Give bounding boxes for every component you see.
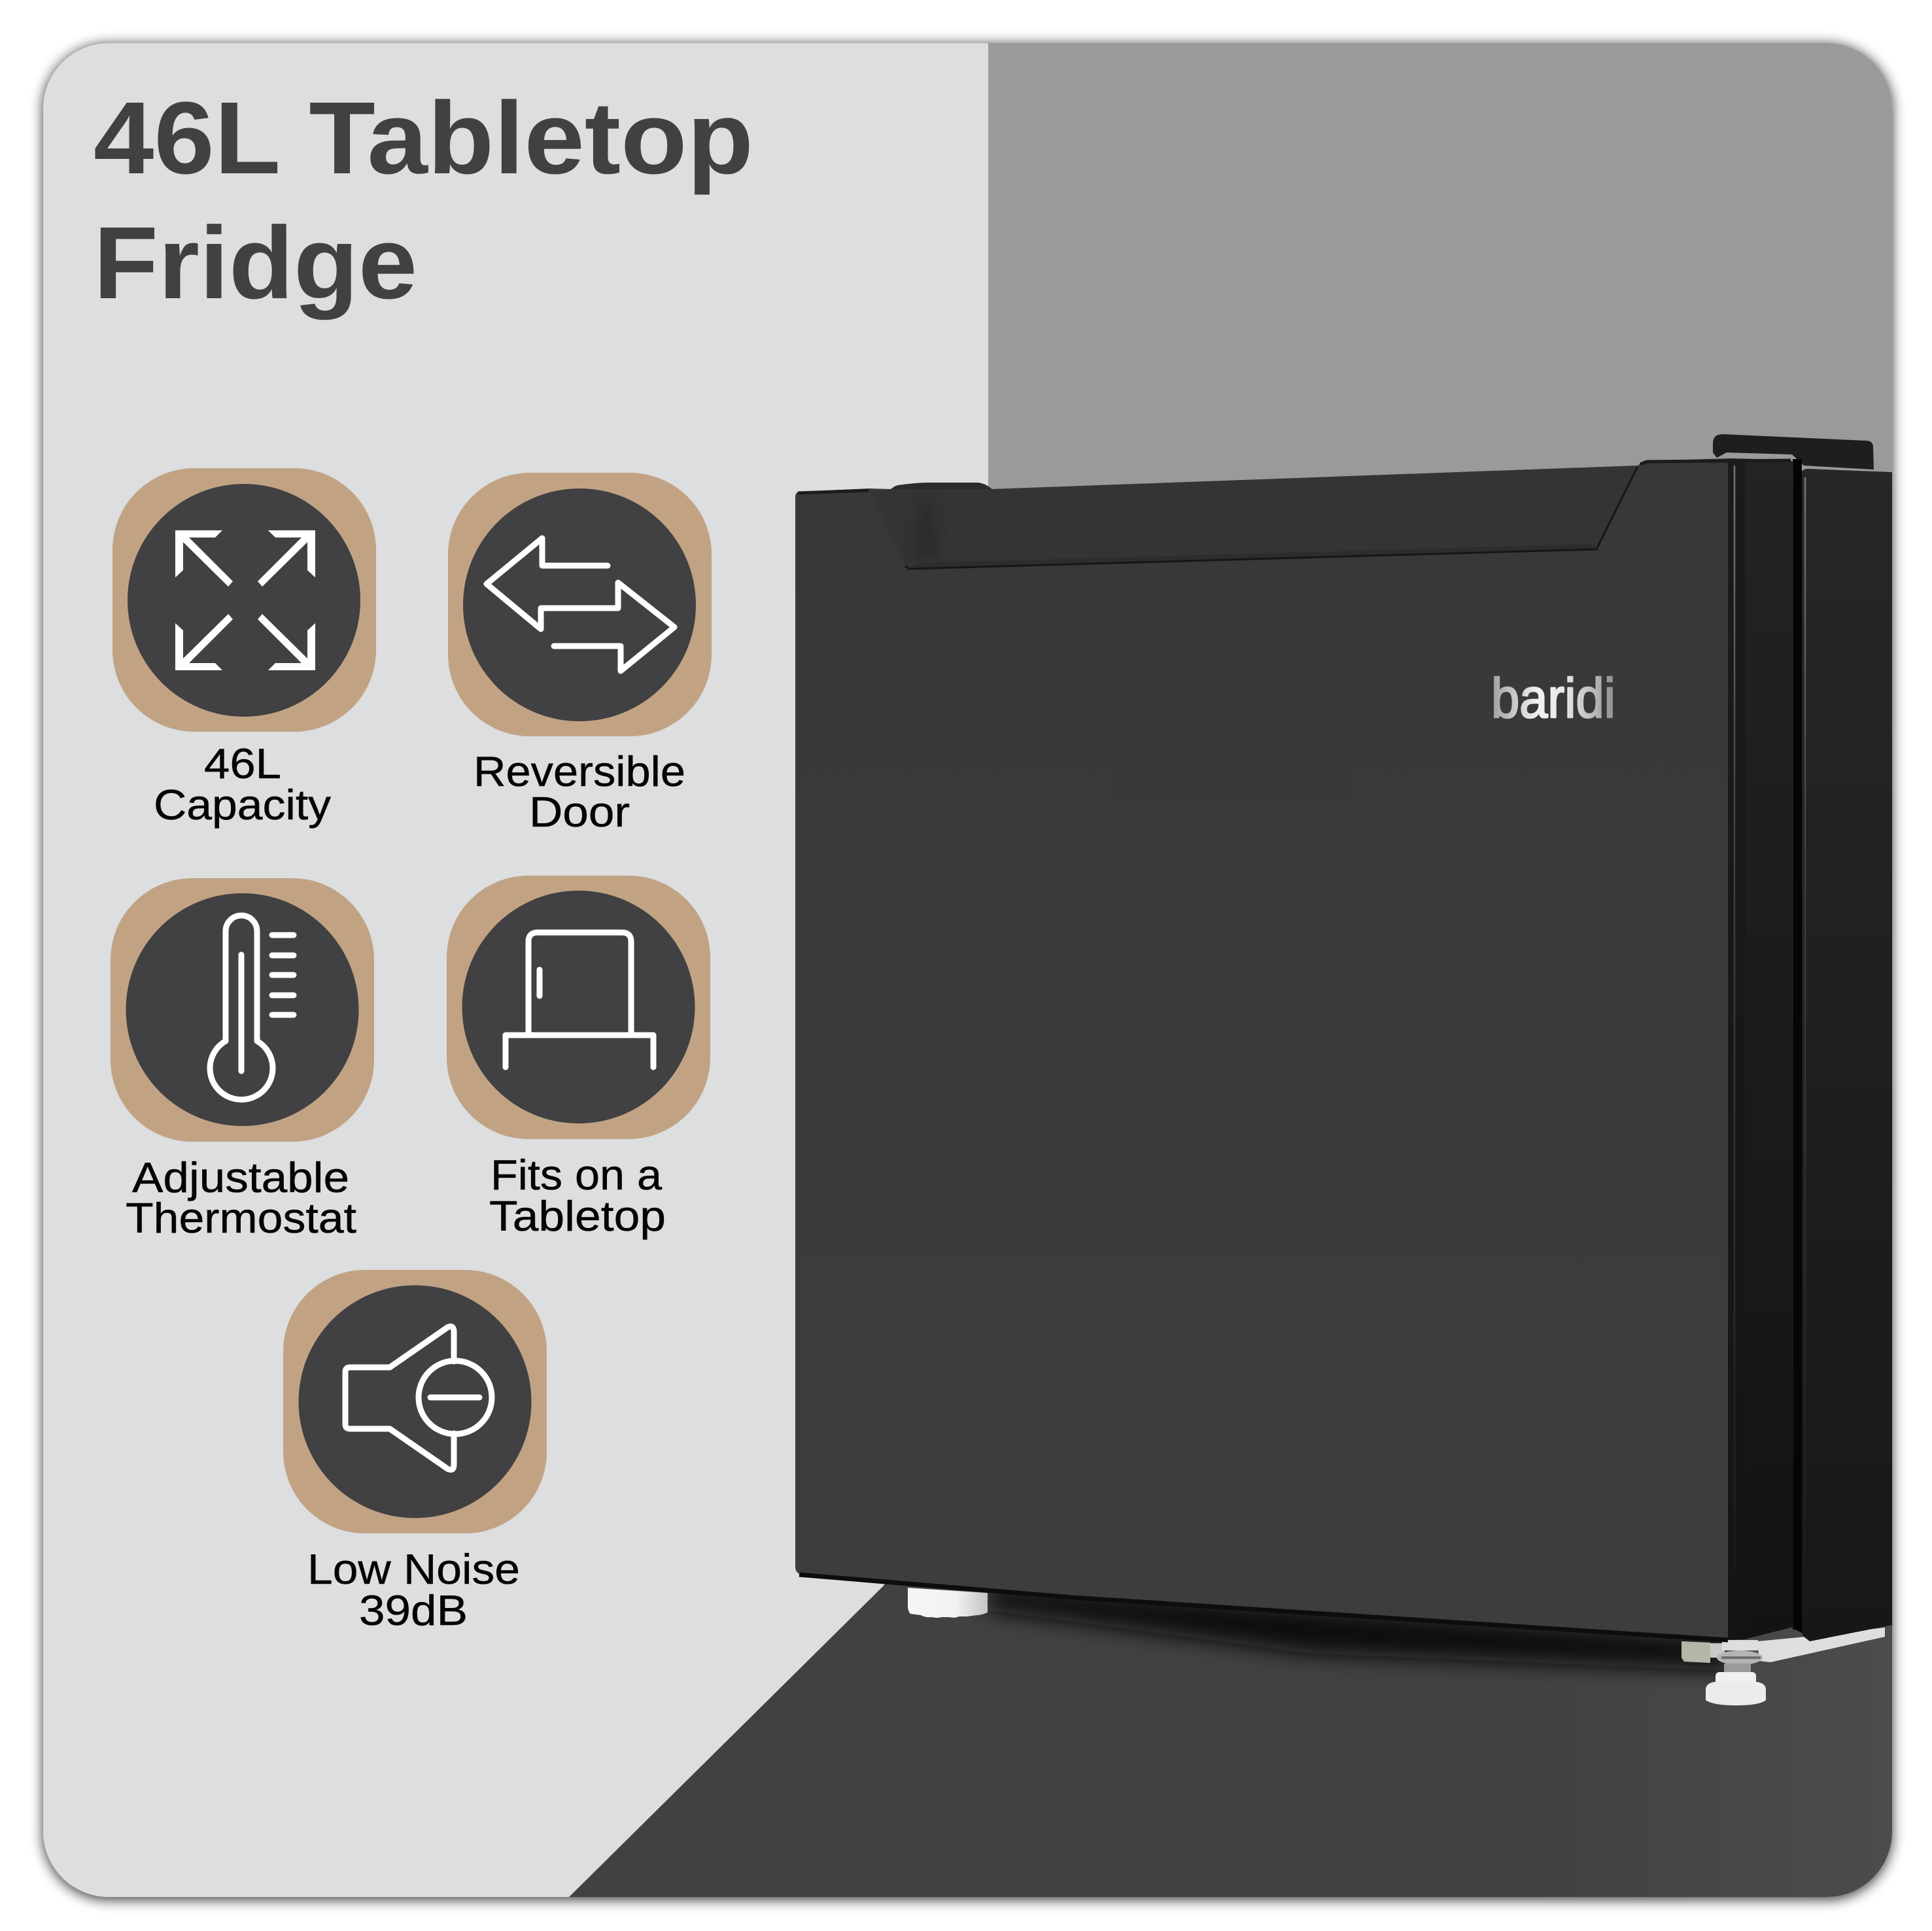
left foot xyxy=(908,1588,988,1618)
title: 46L Tabletop xyxy=(94,81,753,196)
icon: speaker with minus xyxy=(345,1327,492,1470)
fridge shadow on floor xyxy=(988,1586,1733,1671)
icon: thermometer xyxy=(210,915,294,1100)
feature: 46L capacity xyxy=(112,468,376,829)
icon badge xyxy=(112,468,376,732)
hinge top xyxy=(1713,434,1874,470)
label: Capacity xyxy=(154,781,332,829)
logo baridi: baridi xyxy=(1491,668,1615,730)
title: Fridge xyxy=(94,206,417,320)
bracket bar xyxy=(1757,1628,1885,1662)
panel: gray wall xyxy=(988,43,1892,489)
right foot xyxy=(1706,1672,1766,1705)
icon: fridge on table xyxy=(506,932,653,1067)
label xyxy=(126,1153,356,1242)
label: Low Noise xyxy=(307,1545,520,1593)
icon badge xyxy=(447,876,710,1139)
bracket plate xyxy=(1682,1641,1710,1663)
label xyxy=(489,1151,666,1240)
title xyxy=(94,81,753,320)
door side strip xyxy=(1728,458,1793,1640)
feature: reversible door xyxy=(448,473,712,836)
label: 46L xyxy=(204,740,281,787)
feature: low noise xyxy=(283,1270,547,1634)
handle recess xyxy=(871,466,1638,569)
label xyxy=(307,1545,520,1634)
handle recess lower line xyxy=(905,466,1638,569)
icon badge xyxy=(283,1270,547,1533)
label xyxy=(154,740,332,829)
label: Tabletop xyxy=(489,1192,666,1240)
icon badge xyxy=(111,878,374,1142)
feature: adjustable thermostat xyxy=(111,878,374,1242)
icon badge xyxy=(448,473,712,736)
foot cap xyxy=(1706,1682,1766,1705)
label: 39dB xyxy=(359,1586,468,1634)
fridge gap xyxy=(1793,459,1802,1633)
label: Fits on a xyxy=(491,1151,663,1199)
screw xyxy=(1724,1664,1751,1674)
icon: expand arrows xyxy=(175,530,315,670)
label: Thermostat xyxy=(126,1194,356,1242)
strip highlights xyxy=(1734,466,1805,1569)
label xyxy=(474,747,685,836)
fridge side body xyxy=(1800,469,1892,1641)
strip left band xyxy=(1728,460,1745,1639)
door bottom edge xyxy=(799,1575,1728,1640)
right hinge bracket xyxy=(1682,1628,1885,1674)
foot stem xyxy=(1716,1672,1756,1686)
door panel xyxy=(795,458,1728,1640)
door top rim xyxy=(798,460,1791,493)
feature: fits on a tabletop xyxy=(447,876,710,1240)
panel: dark floor xyxy=(569,1584,1892,1897)
icon: reversible arrows xyxy=(487,538,674,671)
label: Door xyxy=(529,788,630,836)
rear handle bump xyxy=(891,483,993,490)
label: Reversible xyxy=(474,747,685,795)
label: Adjustable xyxy=(132,1153,349,1201)
fridge illustration xyxy=(795,434,1892,1705)
nut xyxy=(1717,1650,1763,1665)
faint door panel mark xyxy=(1115,672,1349,801)
recess shading xyxy=(912,500,940,561)
bearing disk xyxy=(1722,1640,1758,1650)
recess bevel xyxy=(908,544,1596,568)
